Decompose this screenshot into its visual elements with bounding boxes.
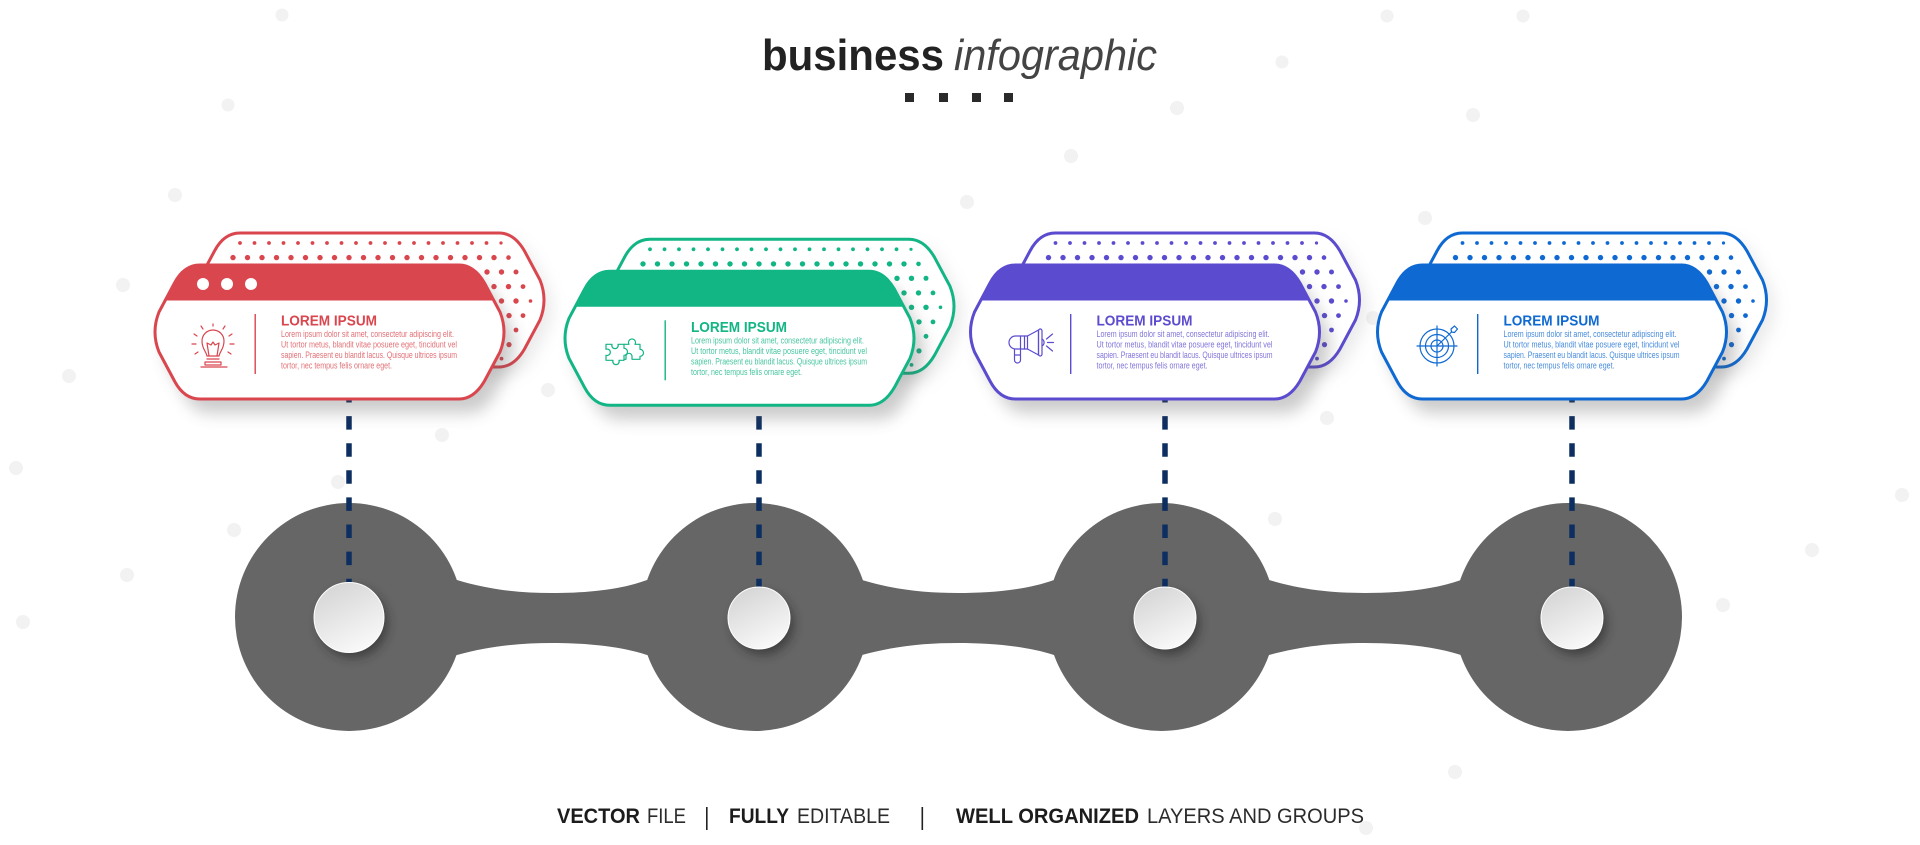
divider (254, 314, 256, 374)
footer caption (557, 805, 1364, 830)
text block: LOREM IPSUM (281, 312, 377, 330)
text block: sapien. Praesent eu blandit lacus. Quisque ultrices ipsum (1504, 350, 1680, 360)
text block: Lorem ipsum dolor sit amet, consectetur adipiscing elit. (691, 335, 864, 345)
dashed connector lines (349, 389, 1572, 592)
front panel (565, 271, 924, 419)
text block: LOREM IPSUM (1096, 312, 1192, 330)
footer caption: FILE (647, 805, 686, 828)
divider (664, 320, 666, 380)
front panel (1378, 265, 1736, 413)
front panel (155, 265, 514, 413)
text block (1504, 312, 1680, 370)
text block (691, 319, 867, 377)
text block: sapien. Praesent eu blandit lacus. Quisque ultrices ipsum (1096, 350, 1272, 360)
footer caption: WELL ORGANIZED (956, 805, 1139, 828)
panel: card 1 red (155, 233, 552, 413)
divider (1070, 314, 1071, 374)
text block: Ut tortor metus, blandit vitae posuere eget, tincidunt vel (1504, 340, 1680, 350)
text block: tortor, nec tempus felis ornare eget. (1504, 360, 1614, 370)
node 4 (1541, 587, 1607, 655)
title: infographic (954, 31, 1157, 80)
text block: tortor, nec tempus felis ornare eget. (691, 367, 802, 377)
panel: card 4 blue (1378, 233, 1774, 413)
text block (281, 312, 457, 370)
text block (1096, 312, 1272, 370)
footer caption: LAYERS AND GROUPS (1147, 805, 1364, 828)
title (762, 31, 1157, 80)
panel: card 2 green (565, 239, 962, 419)
text block: Lorem ipsum dolor sit amet, consectetur adipiscing elit. (281, 329, 454, 339)
panel: card 3 purple (970, 233, 1368, 413)
back dotted panel (195, 233, 552, 375)
text block: Ut tortor metus, blandit vitae posuere eget, tincidunt vel (281, 340, 457, 350)
footer caption: VECTOR (557, 805, 640, 828)
icon: light bulb (192, 324, 234, 367)
node 3 (1134, 587, 1200, 655)
node 2 (728, 587, 794, 655)
text block: sapien. Praesent eu blandit lacus. Quisque ultrices ipsum (691, 356, 867, 366)
footer caption: FULLY (729, 805, 789, 828)
text block: tortor, nec tempus felis ornare eget. (281, 360, 392, 370)
footer caption: EDITABLE (797, 805, 890, 828)
text block: Lorem ipsum dolor sit amet, consectetur adipiscing elit. (1096, 329, 1270, 339)
text block: sapien. Praesent eu blandit lacus. Quisque ultrices ipsum (281, 350, 457, 360)
timeline band: gray circles and necks (235, 503, 1682, 731)
text block: LOREM IPSUM (691, 319, 787, 336)
text block: Lorem ipsum dolor sit amet, consectetur adipiscing elit. (1504, 329, 1676, 339)
divider (1477, 314, 1478, 374)
back dotted panel (605, 239, 962, 381)
back dotted panel (1418, 233, 1774, 375)
text block: tortor, nec tempus felis ornare eget. (1096, 360, 1208, 370)
icon: megaphone (1009, 329, 1054, 363)
text block: Ut tortor metus, blandit vitae posuere eget, tincidunt vel (1096, 340, 1272, 350)
node 1 (314, 582, 388, 658)
front panel (970, 265, 1330, 413)
text block: Ut tortor metus, blandit vitae posuere eget, tincidunt vel (691, 346, 867, 356)
icon: puzzle (606, 339, 644, 365)
icon: target (1417, 326, 1458, 366)
window dots (197, 278, 257, 290)
back dotted panel (1010, 233, 1368, 375)
text block: LOREM IPSUM (1504, 312, 1600, 330)
title: business (762, 31, 944, 80)
title square markers (905, 93, 1013, 102)
